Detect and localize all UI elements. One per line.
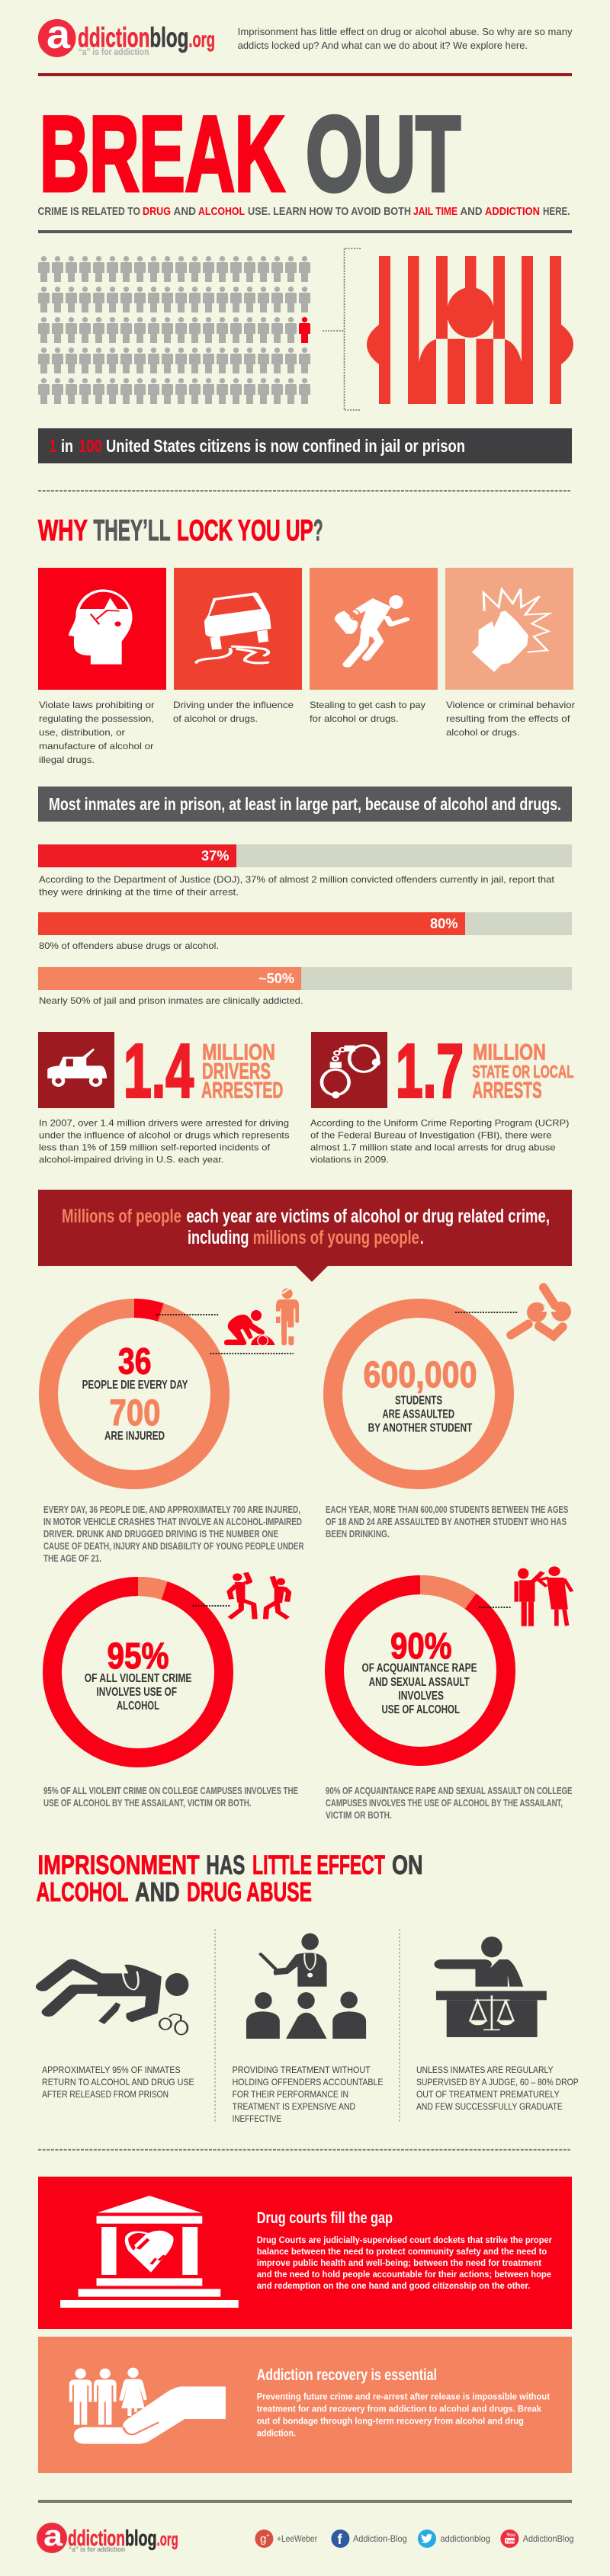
- icon: two people drinking and fighting: [230, 1572, 289, 1619]
- subtitle: ADDICTION: [485, 206, 540, 218]
- icon: jeep with arrested driver: [47, 1049, 107, 1087]
- caption: motor vehicle crashes: THE AGE OF 21.: [43, 1553, 101, 1564]
- social: youtube: Tube: [506, 2539, 515, 2544]
- subtitle: JAIL TIME: [413, 206, 458, 218]
- header logo: blog: [149, 22, 188, 53]
- intro text: Imprisonment has little effect on drug or alcohol abuse. So why are so many: [238, 26, 573, 37]
- donut: 90%: 90%: [390, 1626, 451, 1667]
- donut: 90%: [334, 1575, 506, 1756]
- text: state or local arrests: violations in 2009.: [310, 1154, 389, 1165]
- heading: why they'll lock you up: WHY: [38, 514, 88, 547]
- heading: imprisonment has little effect: HAS: [206, 1850, 245, 1880]
- text: state or local arrests: of the Federal Bureau of Investigation (FBI), there were: [310, 1129, 552, 1140]
- social: twitter: addictionblog: [441, 2533, 490, 2544]
- social: youtube: You: [506, 2533, 515, 2538]
- caption: driving: Driving under the influence: [173, 700, 294, 710]
- callout banner: millions of people: [38, 1190, 572, 1282]
- heading: imprisonment has little effect: DRUG ABUSE: [187, 1878, 312, 1908]
- social: google plus: +: [266, 2532, 270, 2539]
- donut: 90%: AND SEXUAL ASSAULT: [369, 1676, 470, 1689]
- panel: driving under the influence: [174, 568, 302, 690]
- social: facebook: Addiction-Blog: [353, 2533, 407, 2544]
- heading: why they'll lock you up: THEY’LL: [93, 514, 171, 547]
- bar: ~50%: ~50%: [258, 970, 294, 986]
- panel: drug courts: and the need to hold people accountable for their actions; between hope: [257, 2269, 551, 2280]
- panel: addiction recovery: Preventing future crime and re-arrest after release is impossible without: [257, 2391, 550, 2401]
- text: drivers arrested: [39, 1117, 290, 1165]
- bar 50% text: Nearly 50% of jail and prison inmates are clinically addicted.: [39, 995, 303, 1006]
- bar: ~50%: [38, 967, 572, 990]
- footer logo: “a” is for addiction: [69, 2546, 125, 2554]
- intro text: [238, 26, 573, 51]
- panel: drug courts: Drug courts fill the gap: [257, 2209, 393, 2227]
- text: return to alcohol: APPROXIMATELY 95% OF INMATES: [42, 2065, 181, 2075]
- panel: drug courts: balance between the need to protect community safety and the need to: [257, 2246, 547, 2257]
- panel: drug courts: [38, 2177, 572, 2329]
- icon: handcuffs: [322, 1046, 380, 1098]
- stat: 1.7 million arrests: 1.7: [396, 1029, 464, 1114]
- donut: 90%: OF ACQUAINTANCE RAPE: [361, 1662, 477, 1675]
- icon: head with broken glass: [69, 589, 133, 665]
- text: supervised by a judge: UNLESS INMATES ARE REGULARLY: [416, 2065, 554, 2075]
- bar 37% text: [39, 874, 555, 897]
- icon: doctor lecturing group: [246, 1934, 366, 2039]
- stat: 1.7 million arrests: [311, 1029, 573, 1114]
- bar 37% text: According to the Department of Justice (DOJ), 37% of almost 2 million convicted offenders currently in jail, report that: [39, 874, 555, 885]
- stat band: 1 in 100: United States citizens is now confined in jail or prison: [106, 436, 465, 456]
- icon: CPR and injured person: [224, 1288, 299, 1346]
- subtitle: AND: [174, 206, 196, 218]
- caption: motor vehicle crashes: EVERY DAY, 36 PEOPLE DIE, AND APPROXIMATELY 700 ARE INJURED,: [43, 1504, 300, 1515]
- panel: violate laws: [38, 568, 166, 690]
- text: drivers arrested: less than 1% of 159 million self-reported incidents of: [39, 1142, 271, 1152]
- header logo: [38, 12, 215, 57]
- text: providing treatment: HOLDING OFFENDERS ACCOUNTABLE: [233, 2077, 383, 2087]
- stat band: 1 in 100: 100: [79, 436, 102, 456]
- panel: drug courts: and redemption on the one hand and good citizenship on the other.: [257, 2280, 530, 2291]
- panel: stealing: [310, 568, 438, 690]
- icon: couple arguing: [514, 1566, 572, 1626]
- pictogram: 100 people, one in red: [38, 256, 310, 404]
- panel: violence: [445, 568, 573, 690]
- footer logo: [37, 2520, 178, 2554]
- donut: 36 die, 700 injured: PEOPLE DIE EVERY DAY: [82, 1379, 188, 1392]
- footer logo: blog: [125, 2526, 157, 2551]
- caption: driving: of alcohol or drugs.: [173, 713, 258, 724]
- caption: stealing: for alcohol or drugs.: [310, 713, 398, 724]
- caption: acquaintance rape: [326, 1786, 572, 1821]
- donut: 36 die, 700 injured: 700: [110, 1393, 160, 1434]
- heading: imprisonment has little effect: IMPRISONMENT: [38, 1850, 200, 1880]
- header logo: ddiction: [78, 22, 149, 53]
- text: return to alcohol: RETURN TO ALCOHOL AND DRUG USE: [42, 2077, 194, 2087]
- caption: motor vehicle crashes: IN MOTOR VEHICLE CRASHES THAT INVOLVE AN ALCOHOL-IMPAIRED: [43, 1517, 302, 1527]
- stat: 1.4 million drivers: ARRESTED: [201, 1078, 283, 1104]
- subtitle: CRIME IS RELATED TO: [38, 206, 140, 218]
- icon: judge at bench: [436, 1937, 547, 2037]
- text: drivers arrested: In 2007, over 1.4 million drivers were arrested for driving: [39, 1117, 289, 1128]
- text: providing treatment: PROVIDING TREATMENT WITHOUT: [233, 2065, 371, 2075]
- donut: 600,000 students: BY ANOTHER STUDENT: [368, 1422, 473, 1434]
- caption: violate laws: Violate laws prohibiting or: [39, 700, 154, 710]
- text: state or local arrests: almost 1.7 million state and local arrests for drug abuse: [310, 1142, 556, 1152]
- bar 37% text: they were drinking at the time of their arrest.: [39, 886, 239, 897]
- caption: stealing: Stealing to get cash to pay: [310, 700, 425, 710]
- title: BREAK: [40, 94, 284, 213]
- footer logo: ddiction: [68, 2526, 125, 2551]
- icon: fighting students: [511, 1287, 571, 1336]
- stat: 1.7 million arrests: MILLION: [473, 1040, 546, 1065]
- text: supervised by a judge: OUT OF TREATMENT PREMATURELY: [416, 2089, 560, 2100]
- stat band: 1 in 100: in: [61, 436, 73, 456]
- heading: why they'll lock you up: LOCK YOU UP: [177, 514, 313, 547]
- caption: students: [326, 1504, 568, 1540]
- caption: students: BEEN DRINKING.: [326, 1529, 390, 1540]
- social: google plus: [255, 2530, 317, 2548]
- text: drivers arrested: under the influence of alcohol or drugs which represents: [39, 1129, 290, 1140]
- caption: violate laws: use, distribution, or: [39, 727, 125, 738]
- donut: 95%: 95%: [107, 1636, 169, 1677]
- text: supervised by a judge: [416, 2065, 579, 2112]
- intro text: addicts locked up? And what can we do about it? We explore here.: [238, 40, 528, 51]
- caption: violence: [446, 700, 575, 738]
- text: state or local arrests: [310, 1117, 569, 1165]
- icon: courthouse with handshake heart: [60, 2196, 239, 2308]
- icon: hand holding people: [69, 2368, 226, 2444]
- icon: running thief with bag: [335, 595, 406, 665]
- bar: 80%: [38, 912, 572, 935]
- panel: addiction recovery: addiction.: [257, 2427, 296, 2438]
- panel: addiction recovery: [38, 2337, 572, 2473]
- caption: violence: Violence or criminal behavior: [446, 700, 575, 710]
- heading: imprisonment has little effect: ON: [392, 1850, 423, 1880]
- social: google plus: g: [260, 2533, 266, 2546]
- subtitle: DRUG: [143, 206, 171, 218]
- panel: addiction recovery: treatment for and recovery from addiction to alcohol and drugs. Break: [257, 2403, 541, 2414]
- callout banner: millions of people: Millions of people: [62, 1206, 181, 1227]
- band: most inmates: [38, 787, 572, 822]
- heading: why they'll lock you up: [38, 514, 323, 547]
- caption: violence: alcohol or drugs.: [446, 727, 520, 738]
- heading: imprisonment has little effect: AND: [135, 1878, 180, 1908]
- heading: imprisonment has little effect: ALCOHOL: [37, 1878, 128, 1908]
- social: facebook: f: [337, 2532, 343, 2547]
- text: return to alcohol: [42, 2065, 194, 2100]
- stat: 1.4 million drivers: [38, 1029, 283, 1114]
- dotted leader: [192, 1605, 230, 1607]
- donut: 90%: INVOLVES: [398, 1690, 444, 1703]
- social: youtube: [500, 2530, 573, 2548]
- text: supervised by a judge: AND FEW SUCCESSFULLY GRADUATE: [416, 2101, 563, 2112]
- donut: 600,000 students: 600,000: [363, 1355, 477, 1395]
- bar: 80%: 80%: [430, 915, 458, 931]
- donut: 95%: INVOLVES USE OF: [96, 1686, 177, 1699]
- caption: violent crime: [43, 1786, 298, 1809]
- dotted leader: [479, 1607, 512, 1608]
- caption: stealing: [310, 700, 425, 724]
- text: providing treatment: FOR THEIR PERFORMANCE IN: [233, 2089, 348, 2100]
- panel: drug courts: improve public health and well-being; between the need for treatment: [257, 2257, 541, 2268]
- subtitle: [38, 206, 570, 218]
- donut: 95%: [52, 1577, 224, 1757]
- icon: fist with burst: [472, 589, 549, 672]
- donut: 36 die, 700 injured: ARE INJURED: [104, 1430, 165, 1443]
- donut: 600,000 students: ARE ASSAULTED: [383, 1408, 454, 1421]
- donut: 95%: ALCOHOL: [117, 1700, 159, 1713]
- social: google plus: +LeeWeber: [277, 2533, 317, 2544]
- donut: 36 die, 700 injured: [49, 1299, 220, 1480]
- caption: violence: resulting from the effects of: [446, 713, 570, 724]
- text: state or local arrests: According to the Uniform Crime Reporting Program (UCRP): [310, 1117, 569, 1128]
- social: youtube: AddictionBlog: [523, 2533, 573, 2544]
- social: facebook: [331, 2530, 407, 2548]
- dotted bracket: [323, 248, 361, 410]
- subtitle: AND: [461, 206, 482, 218]
- callout banner: millions of people: millions of young people: [253, 1227, 419, 1248]
- stat band: 1 in 100: [38, 428, 572, 463]
- heading: imprisonment has little effect: [37, 1850, 423, 1908]
- bar: 37%: [38, 844, 572, 867]
- heading: imprisonment has little effect: LITTLE EFFECT: [252, 1850, 385, 1880]
- dotted leader: [455, 1312, 518, 1313]
- stat: 1.4 million drivers: 1.4: [124, 1029, 194, 1114]
- header logo: “a” is for addiction: [78, 48, 149, 57]
- text: providing treatment: TREATMENT IS EXPENSIVE AND: [233, 2101, 355, 2112]
- header logo: .org: [188, 28, 215, 53]
- caption: violent crime: USE OF ALCOHOL BY THE ASSAILANT, VICTIM OR BOTH.: [43, 1798, 252, 1809]
- subtitle: ALCOHOL: [198, 206, 245, 218]
- dotted leaders: [156, 1315, 294, 1354]
- stat: 1.4 million drivers: DRIVERS: [202, 1059, 271, 1085]
- footer logo: .org: [157, 2530, 178, 2550]
- text: providing treatment: INEFFECTIVE: [233, 2113, 281, 2124]
- caption: motor vehicle crashes: [43, 1504, 303, 1564]
- stat: 1.7 million arrests: ARRESTS: [472, 1078, 542, 1104]
- text: supervised by a judge: SUPERVISED BY A JUDGE, 60 – 80% DROP: [416, 2077, 579, 2087]
- caption: driving: [173, 700, 294, 724]
- header logo: a: [47, 12, 71, 57]
- bar 80% text: 80% of offenders abuse drugs or alcohol.: [39, 940, 219, 951]
- footer logo: a: [43, 2520, 63, 2552]
- stat: 1.4 million drivers: MILLION: [202, 1040, 275, 1065]
- caption: motor vehicle crashes: DRIVER. DRUNK AND DRUGGED DRIVING IS THE NUMBER ONE: [43, 1529, 278, 1540]
- panel: drug courts: Drug Courts are judicially-supervised court dockets that strike the proper: [257, 2235, 552, 2245]
- donut: 600,000 students: [332, 1308, 505, 1480]
- donut: 600,000 students: STUDENTS: [395, 1395, 442, 1407]
- text: return to alcohol: AFTER RELEASED FROM PRISON: [42, 2089, 169, 2100]
- text: providing treatment: [233, 2065, 383, 2124]
- icon: person passed out with bottle and cuffs: [43, 1964, 188, 2035]
- donut: 36 die, 700 injured: 36: [118, 1342, 151, 1383]
- subtitle: HERE.: [543, 206, 570, 218]
- donut: 95%: OF ALL VIOLENT CRIME: [85, 1672, 192, 1685]
- caption: violent crime: 95% OF ALL VIOLENT CRIME ON COLLEGE CAMPUSES INVOLVES THE: [43, 1786, 298, 1796]
- heading: why they'll lock you up: ?: [313, 514, 323, 547]
- subtitle: USE. LEARN HOW TO AVOID BOTH: [248, 206, 411, 218]
- donut: 90%: USE OF ALCOHOL: [381, 1703, 460, 1716]
- panel: addiction recovery: Addiction recovery is essential: [257, 2366, 437, 2384]
- stat band: 1 in 100: 1: [50, 436, 56, 456]
- caption: motor vehicle crashes: CAUSE OF DEATH, INJURY AND DISABILITY OF YOUNG PEOPLE UNDER: [43, 1541, 303, 1552]
- title: OUT: [306, 94, 461, 213]
- callout banner: millions of people: .: [420, 1227, 424, 1248]
- callout banner: millions of people: including: [188, 1227, 249, 1248]
- bar: 37%: 37%: [201, 847, 229, 863]
- icon: skidding car: [197, 592, 271, 663]
- caption: violate laws: manufacture of alcohol or: [39, 741, 154, 751]
- icon: person behind bars: [367, 256, 573, 404]
- caption: violate laws: regulating the possession,: [39, 713, 154, 724]
- panel: addiction recovery: out of bondage through long-term recovery from alcohol and drug: [257, 2415, 524, 2426]
- caption: violate laws: illegal drugs.: [39, 755, 95, 765]
- caption: violate laws: [39, 700, 154, 765]
- social: twitter: [418, 2530, 490, 2548]
- text: drivers arrested: alcohol-impaired driving in U.S. each year.: [39, 1154, 223, 1165]
- caption: acquaintance rape: VICTIM OR BOTH.: [326, 1810, 392, 1821]
